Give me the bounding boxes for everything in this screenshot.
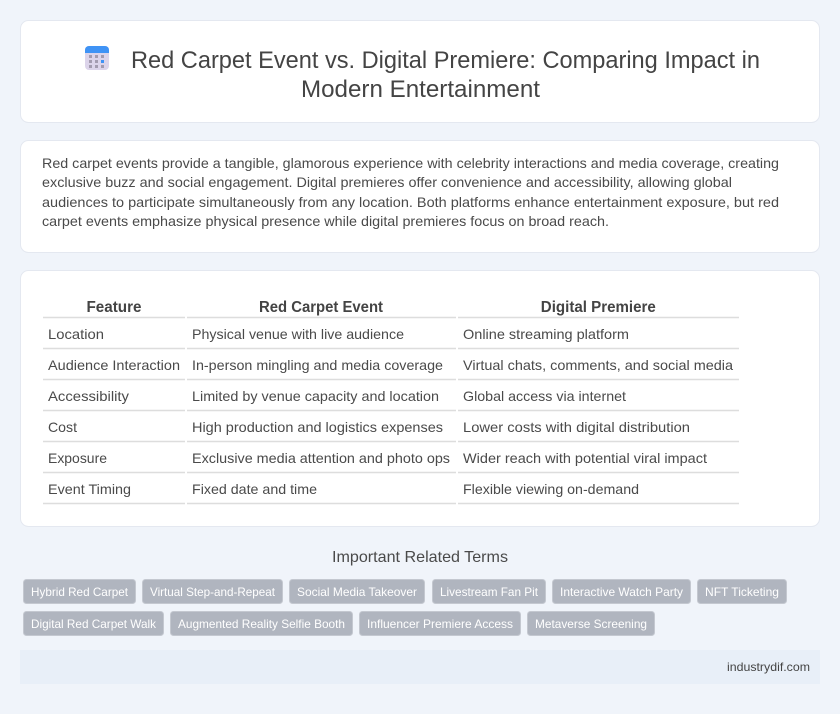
tag: Interactive Watch Party <box>560 585 683 599</box>
tag <box>432 580 546 604</box>
tag <box>24 580 136 604</box>
tag: Influencer Premiere Access <box>367 617 513 631</box>
tag <box>360 612 520 636</box>
tag: Social Media Takeover <box>297 585 417 599</box>
tag <box>552 580 690 604</box>
tag <box>170 612 352 636</box>
related term tags <box>24 580 786 636</box>
panel: summary text <box>20 140 820 252</box>
row: audience interaction <box>48 357 733 373</box>
row: exposure <box>48 450 707 466</box>
row: event timing: Event Timing <box>48 481 131 497</box>
row: event timing: Fixed date and time <box>192 481 317 497</box>
tag <box>24 612 164 636</box>
row: location: Location <box>48 326 104 342</box>
tag <box>698 580 786 604</box>
table header <box>86 299 656 316</box>
row: cost: Cost <box>48 419 77 435</box>
tag: Livestream Fan Pit <box>440 585 539 599</box>
tag: NFT Ticketing <box>705 585 779 599</box>
table header: Digital Premiere <box>541 299 656 316</box>
tag <box>142 580 282 604</box>
panel: header <box>20 20 820 122</box>
row: cost: Lower costs with digital distribution <box>463 419 690 435</box>
icon: calendar <box>85 46 109 70</box>
tag: Hybrid Red Carpet <box>31 585 129 599</box>
tag: Metaverse Screening <box>535 617 647 631</box>
footer bar <box>20 650 820 684</box>
summary paragraph: carpet events emphasize physical presence while digital premieres focus on broad reach. <box>42 213 609 229</box>
tag: Virtual Step-and-Repeat <box>150 585 276 599</box>
row: event timing <box>48 481 639 497</box>
row: exposure: Exclusive media attention and photo ops <box>192 450 450 466</box>
row: event timing: Flexible viewing on-demand <box>463 481 639 497</box>
tag: Digital Red Carpet Walk <box>31 617 157 631</box>
row: audience interaction: Audience Interaction <box>48 357 180 373</box>
row: location: Online streaming platform <box>463 326 629 342</box>
row: cost <box>48 419 690 435</box>
row: audience interaction: In-person mingling and media coverage <box>192 357 443 373</box>
row: location: Physical venue with live audience <box>192 326 404 342</box>
table rules <box>43 318 739 504</box>
summary paragraph: audiences to participate simultaneously from any location. Both platforms enhance entertainment exposure, but red <box>42 194 779 210</box>
row: accessibility <box>48 388 626 404</box>
row: accessibility: Global access via internet <box>463 388 626 404</box>
row: exposure: Exposure <box>48 450 107 466</box>
table header: Feature <box>86 299 142 316</box>
tag: Augmented Reality Selfie Booth <box>178 617 345 631</box>
row: accessibility: Accessibility <box>48 388 129 404</box>
row: exposure: Wider reach with potential viral impact <box>463 450 707 466</box>
summary paragraph: Red carpet events provide a tangible, glamorous experience with celebrity interactions and media coverage, creating <box>42 155 779 171</box>
row: cost: High production and logistics expenses <box>192 419 443 435</box>
panel: comparison table <box>20 270 820 526</box>
table header: Red Carpet Event <box>259 299 384 316</box>
tag <box>528 612 654 636</box>
title: Red Carpet Event vs. Digital Premiere: Comparing Impact in <box>131 47 760 74</box>
footer source: industrydif.com <box>727 660 810 674</box>
title: Modern Entertainment <box>301 76 540 103</box>
row: accessibility: Limited by venue capacity and location <box>192 388 439 404</box>
tag <box>290 580 424 604</box>
summary paragraph: exclusive buzz and social engagement. Digital premieres offer convenience and accessibility, allowing global <box>42 174 732 190</box>
row: location <box>48 326 629 342</box>
row: audience interaction: Virtual chats, comments, and social media <box>463 357 733 373</box>
heading: related terms: Important Related Terms <box>332 549 508 566</box>
